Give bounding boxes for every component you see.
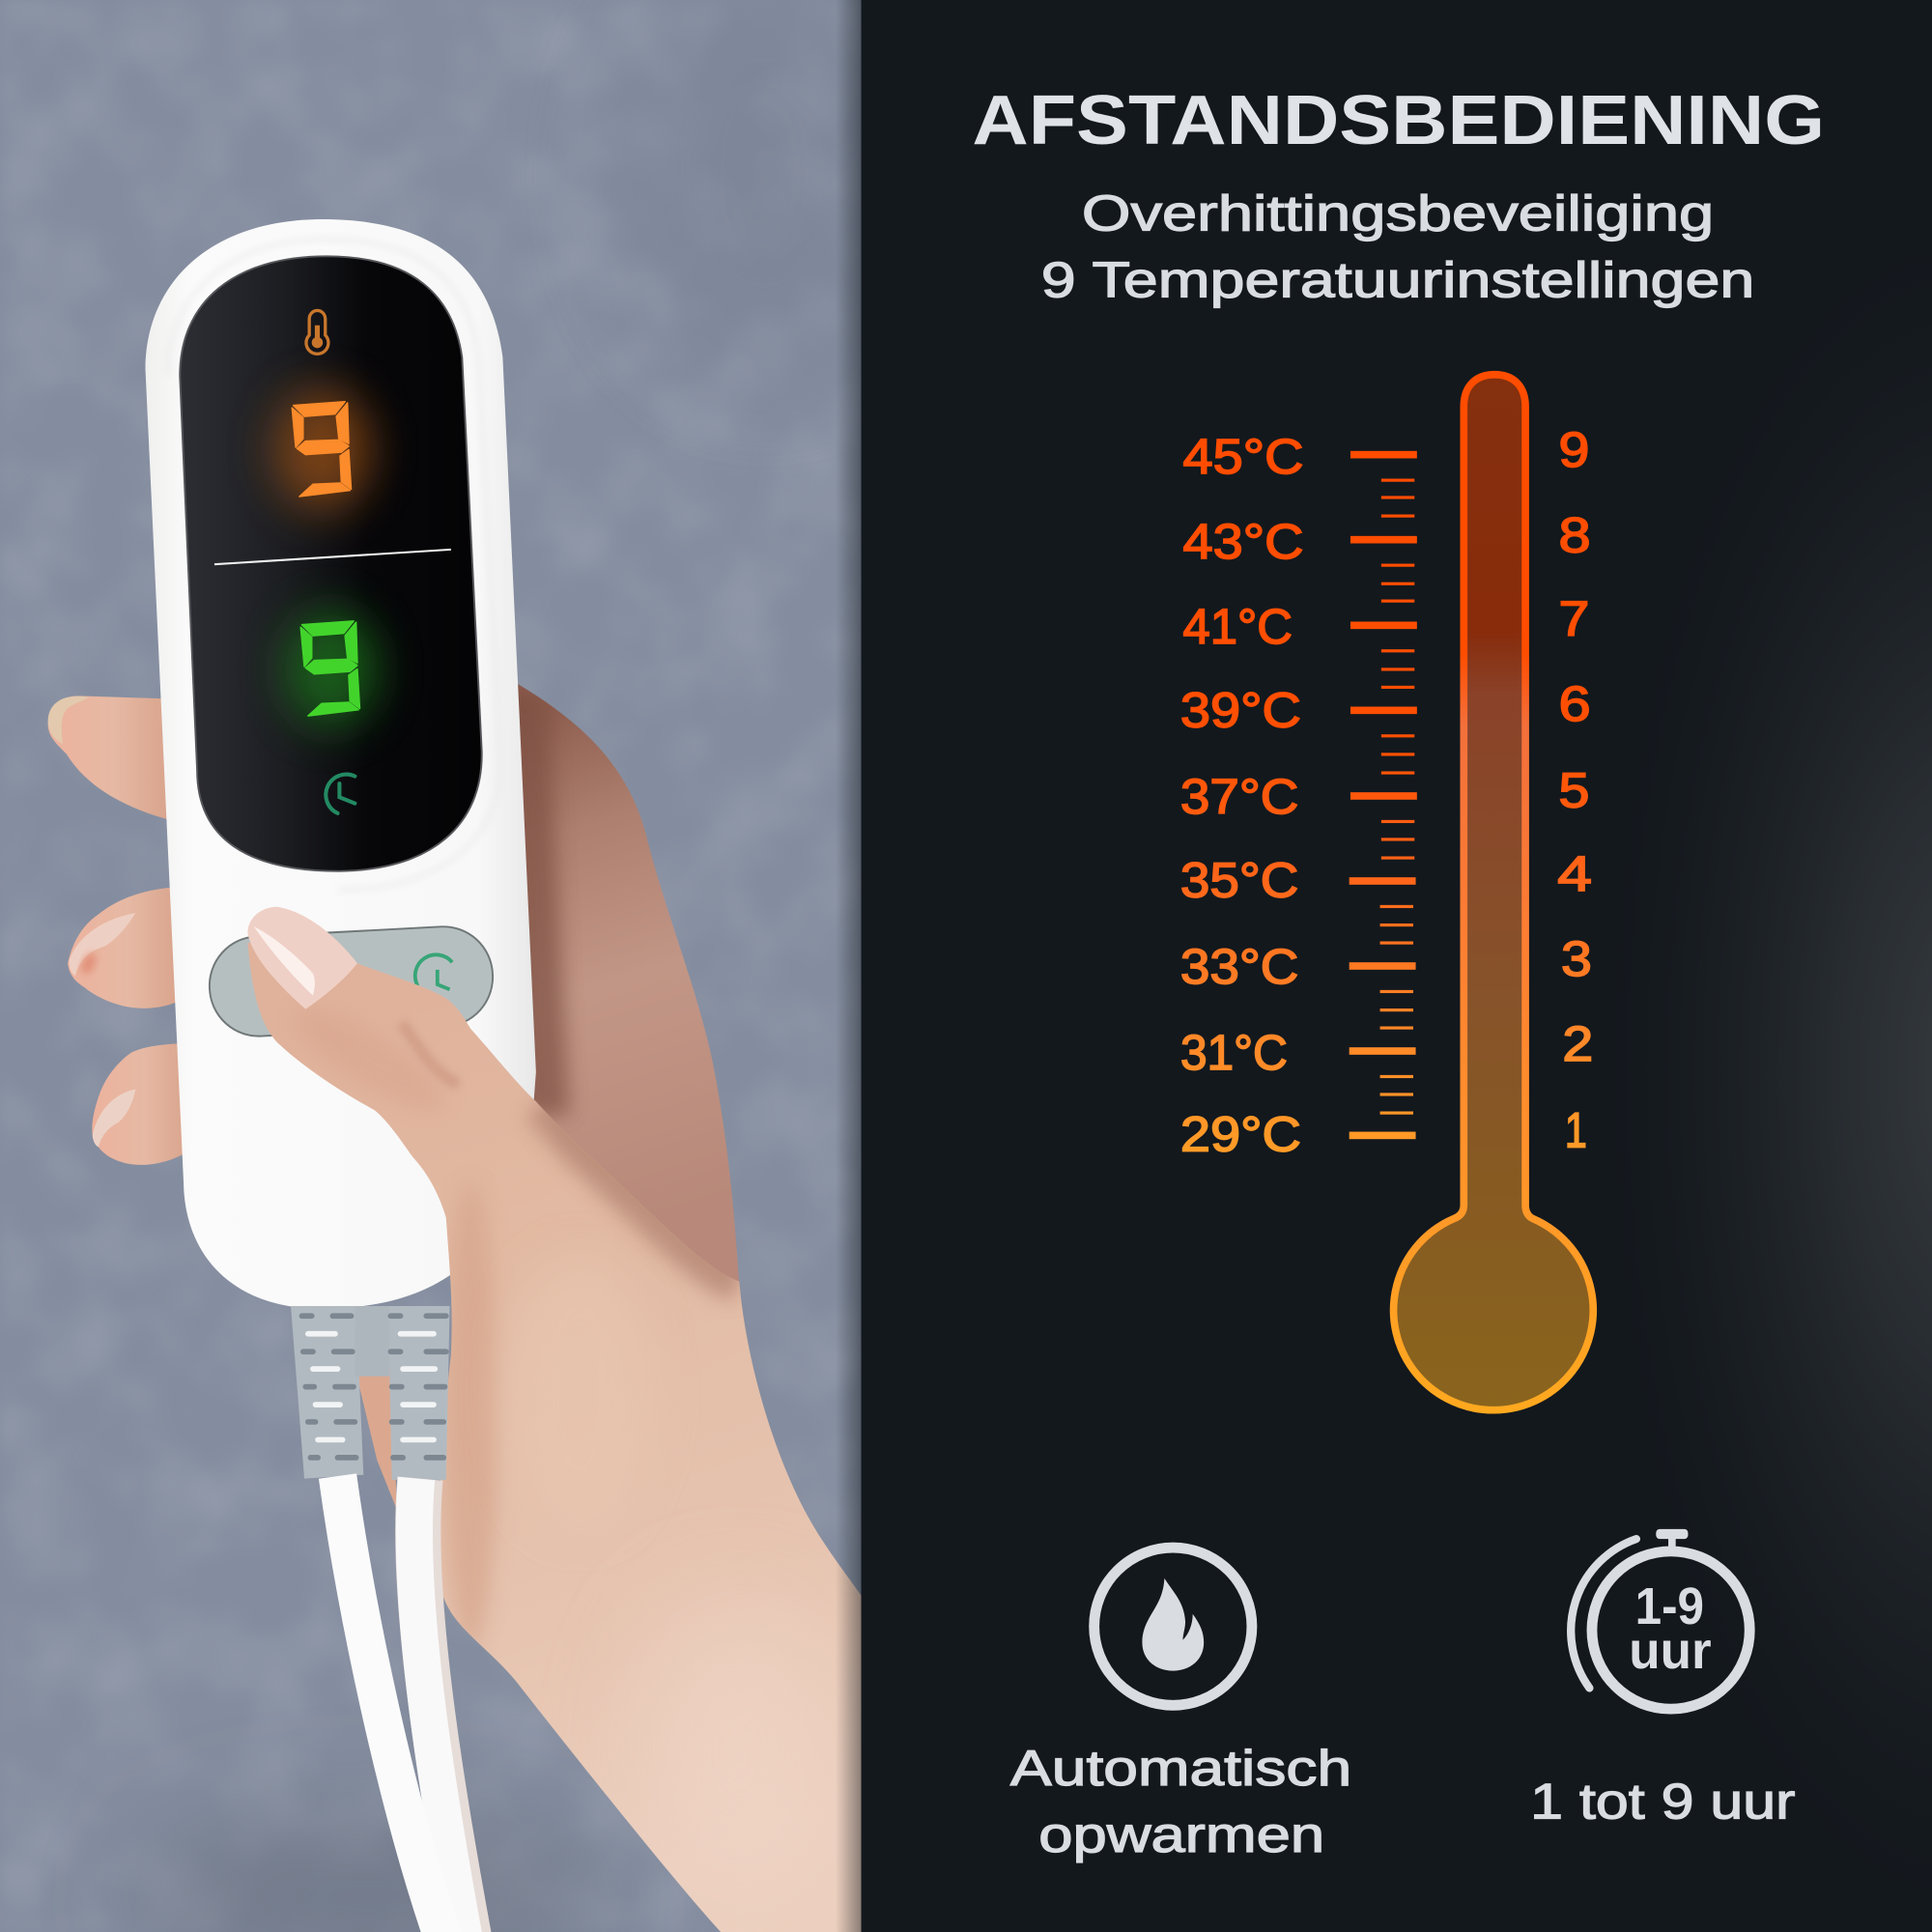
level numbers: 4 xyxy=(1557,846,1592,901)
level numbers: 9 xyxy=(1559,422,1589,477)
icon: stopwatch: uur xyxy=(1629,1623,1712,1680)
connector bridge xyxy=(355,1306,389,1377)
hand: thumb and palm xyxy=(247,907,862,1932)
left connector xyxy=(291,1306,363,1479)
level numbers: 1 xyxy=(1565,1102,1587,1157)
temperature labels xyxy=(1180,429,1303,1161)
ring fingernail xyxy=(93,1090,135,1148)
left fingers behind remote xyxy=(48,696,187,1165)
level numbers: 8 xyxy=(1559,507,1591,562)
caption: automatisch opwarmen xyxy=(1010,1741,1351,1863)
orange digit glow xyxy=(273,388,372,511)
icon: thermometer xyxy=(306,310,328,354)
back of hand behind remote xyxy=(518,684,739,1281)
left cable xyxy=(337,1476,446,1932)
thermometer xyxy=(1394,375,1593,1410)
index fingernail xyxy=(48,696,89,744)
subtitle text: 9 Temperatuurinstellingen xyxy=(1041,252,1754,308)
index finger xyxy=(48,696,167,819)
dark info panel xyxy=(862,0,1932,1932)
caption: automatisch opwarmen: opwarmen xyxy=(1038,1807,1324,1863)
temperature labels: 37°C xyxy=(1180,769,1298,824)
right connector xyxy=(388,1306,450,1480)
remote body xyxy=(146,219,536,1309)
level numbers: 5 xyxy=(1559,762,1589,817)
thumb nail xyxy=(247,907,357,1009)
level numbers xyxy=(1557,422,1593,1157)
level numbers: 2 xyxy=(1562,1016,1593,1071)
middle fingertip colour xyxy=(78,951,99,977)
white cables xyxy=(337,1476,470,1932)
orange digit 9 xyxy=(292,402,352,497)
photo panel: hand holding remote xyxy=(0,0,912,1932)
temperature labels: 33°C xyxy=(1180,939,1298,994)
thermometer scale ticks xyxy=(1350,451,1417,1139)
temperature labels: 31°C xyxy=(1180,1025,1288,1080)
temperature labels: 29°C xyxy=(1180,1106,1301,1161)
subtitle text xyxy=(1041,186,1754,308)
level numbers: 3 xyxy=(1561,931,1592,986)
skin between connectors xyxy=(359,1368,396,1507)
subtitle text: Overhittingsbeveiliging xyxy=(1082,186,1714,242)
remote inner ridge xyxy=(167,239,500,890)
level numbers: 6 xyxy=(1559,676,1591,731)
icon: button clock xyxy=(415,954,452,989)
divider line xyxy=(214,550,451,564)
shadow along remote edge xyxy=(519,697,578,1124)
icon: flame in circle xyxy=(1094,1548,1252,1705)
green digit glow xyxy=(285,610,379,728)
middle finger xyxy=(68,887,178,1009)
temperature labels: 45°C xyxy=(1182,429,1303,484)
middle fingernail xyxy=(69,913,135,976)
green digit 9 xyxy=(300,621,359,716)
icon: stopwatch: 1-9 xyxy=(1635,1578,1704,1635)
icon: stopwatch xyxy=(1571,1529,1749,1709)
temperature labels: 39°C xyxy=(1180,683,1301,738)
icon: clock xyxy=(326,775,355,813)
photo background: grey fabric xyxy=(0,0,912,1932)
ring finger xyxy=(92,1043,187,1165)
right cable xyxy=(418,1479,470,1932)
remote button xyxy=(207,924,496,1038)
title: AFSTANDSBEDIENING xyxy=(972,81,1825,159)
panel edge shadow xyxy=(836,0,862,1932)
remote screen xyxy=(180,256,482,871)
temperature labels: 35°C xyxy=(1180,853,1298,908)
temperature labels: 41°C xyxy=(1182,599,1293,654)
level numbers: 7 xyxy=(1559,591,1589,646)
caption: 1 tot 9 uur: 1 tot 9 uur xyxy=(1530,1775,1795,1831)
connector strain reliefs xyxy=(291,1306,450,1480)
palm shading xyxy=(542,1103,739,1282)
temperature labels: 43°C xyxy=(1182,514,1303,569)
caption: automatisch opwarmen: Automatisch xyxy=(1010,1741,1351,1797)
